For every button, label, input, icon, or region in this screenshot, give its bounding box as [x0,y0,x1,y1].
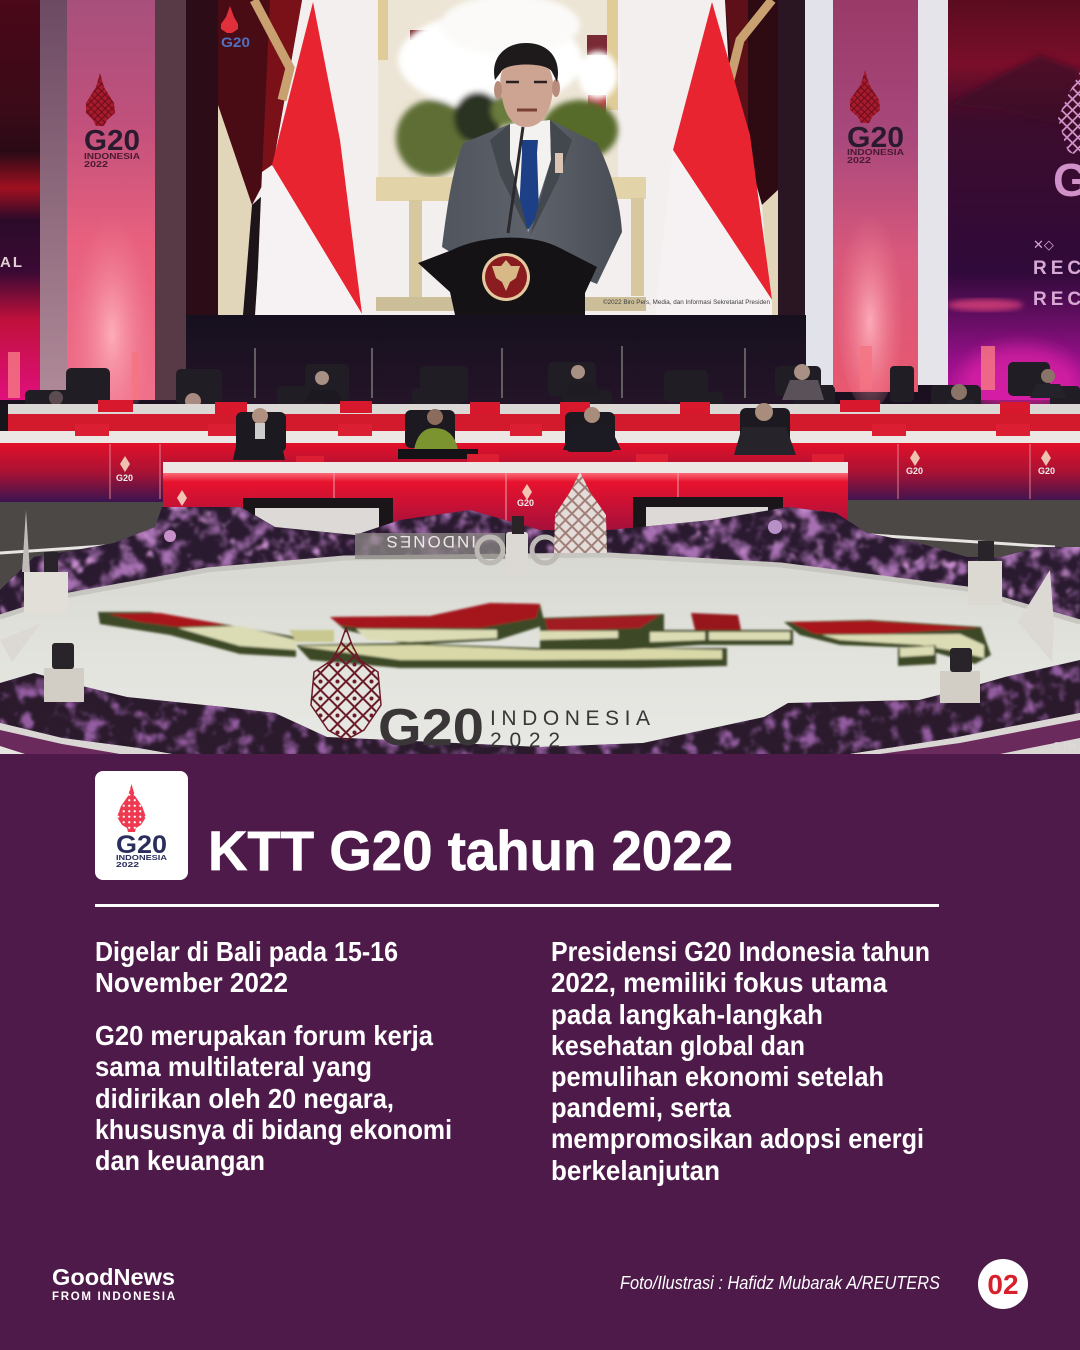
text block: Indonesia presidency: Presidensi G20 Indonesia tahun [551,936,930,967]
video screen [218,0,778,315]
Java [296,643,727,668]
text block: Indonesia presidency [551,936,930,1186]
right column: INDONESIA [847,148,904,157]
text block: what is G20: khususnya di bidang ekonomi [95,1114,452,1145]
text block: Indonesia presidency: pada langkah-langkah [551,999,823,1030]
LED screen frame [186,0,218,315]
small G20 logo on screen: G20 [221,34,250,50]
corner lights and speakers [0,510,1054,703]
wall panels: ✕◇ [1033,237,1054,252]
back row desks [0,400,1080,431]
flag right [673,2,772,315]
brand logo: GoodNews from Indonesia: FROM INDONESIA [52,1291,175,1303]
text block: what is G20: didirikan oleh 20 negara, [95,1083,394,1114]
left column: 2022 [84,160,109,169]
speaker: President [442,43,622,284]
middle row desks: G20 [1038,466,1055,476]
wall panels [0,0,1080,415]
page number badge: 02 [987,1269,1019,1300]
Batik ornament at back [554,472,607,553]
front desk [163,462,848,533]
text block: Indonesia presidency: kesehatan global dan [551,1030,805,1061]
text block: event date [95,936,398,998]
text block: event date: Digelar di Bali pada 15-16 [95,936,398,967]
text block: Indonesia presidency: berkelanjutan [551,1155,720,1186]
middle row desks: G20 [906,466,923,476]
floor [0,500,1080,590]
left column: INDONESIA [84,152,140,161]
photo: G20 summit hall [0,0,1080,757]
map of Indonesia in flowers [98,603,991,668]
text block: event date: November 2022 [95,967,288,998]
video screen: ©2022 Biro Pers, Media, dan Informasi Sekretariat Presiden [603,298,770,306]
curtain right [725,0,778,315]
G20 emblem on floor: 2022 [490,729,560,752]
flower strip at the bottom [0,655,1080,755]
left column: G20 [84,125,140,157]
text block: what is G20: G20 merupakan forum kerja [95,1020,433,1051]
middle row desks: G20 [116,473,133,483]
reflected INDONESIA lettering: INDONES [385,532,476,551]
text block: what is G20: dan keuangan [95,1145,265,1176]
reflected INDONESIA lettering [355,516,560,566]
stage rim corners [0,713,1080,754]
panel: info background [0,754,1080,1350]
delegates: back row chairs and seats [8,346,1080,404]
icon: batik emblem [117,784,146,832]
brand logo: GoodNews from Indonesia: GoodNews [52,1264,175,1290]
text block: Indonesia presidency: pandemi, serta [551,1092,731,1123]
monitors [243,497,783,535]
seated delegates [233,403,844,462]
Sumatra [98,612,296,657]
small G20 logo on screen [221,6,250,50]
G20 emblem on floor: INDONESIA [490,707,650,730]
gilded table [376,177,456,201]
text block: Indonesia presidency: 2022, memiliki fokus utama [551,967,887,998]
page number badge [978,1259,1028,1309]
circular stage [0,555,1080,754]
G20 emblem on floor: G20 [378,699,484,757]
curtain left [218,0,302,315]
text block: what is G20: sama multilateral yang [95,1051,372,1082]
G20 emblem on floor [311,628,650,757]
photo: G20 summit hall: © Ha [1053,741,1076,752]
flowers and leaves [396,0,618,176]
podium [418,238,597,315]
front desk: G20 [517,498,534,508]
flag left [256,2,362,315]
brand logo: GoodNews from Indonesia [52,1264,175,1303]
text block: Indonesia presidency: mempromosikan adopsi energi [551,1123,924,1154]
logo year: 2022 [116,862,139,869]
photo credit: Foto/Ilustrasi : Hafidz Mubarak A/REUTERS [620,1273,940,1293]
wall panels: AL [0,254,24,271]
back wall and frames [378,0,618,180]
G20 logotype: G20 [116,831,167,859]
Kalimantan [330,603,545,645]
Sulawesi row [540,614,793,650]
logo card: G20 Indonesia [95,771,188,880]
left column [40,0,188,430]
middle row desks [0,424,1080,502]
small strip [289,630,334,642]
right column [805,0,948,410]
logo subtitle: INDONESIA [116,855,167,862]
title: KTT G20 tahun 2022 [208,819,733,882]
Papua [784,620,991,664]
text block: what is G20 [95,1020,452,1176]
flower ring: back [0,507,1080,620]
right column: G20 [847,122,904,154]
text block: Indonesia presidency: pemulihan ekonomi setelah [551,1061,884,1092]
right column: 2022 [847,156,872,165]
